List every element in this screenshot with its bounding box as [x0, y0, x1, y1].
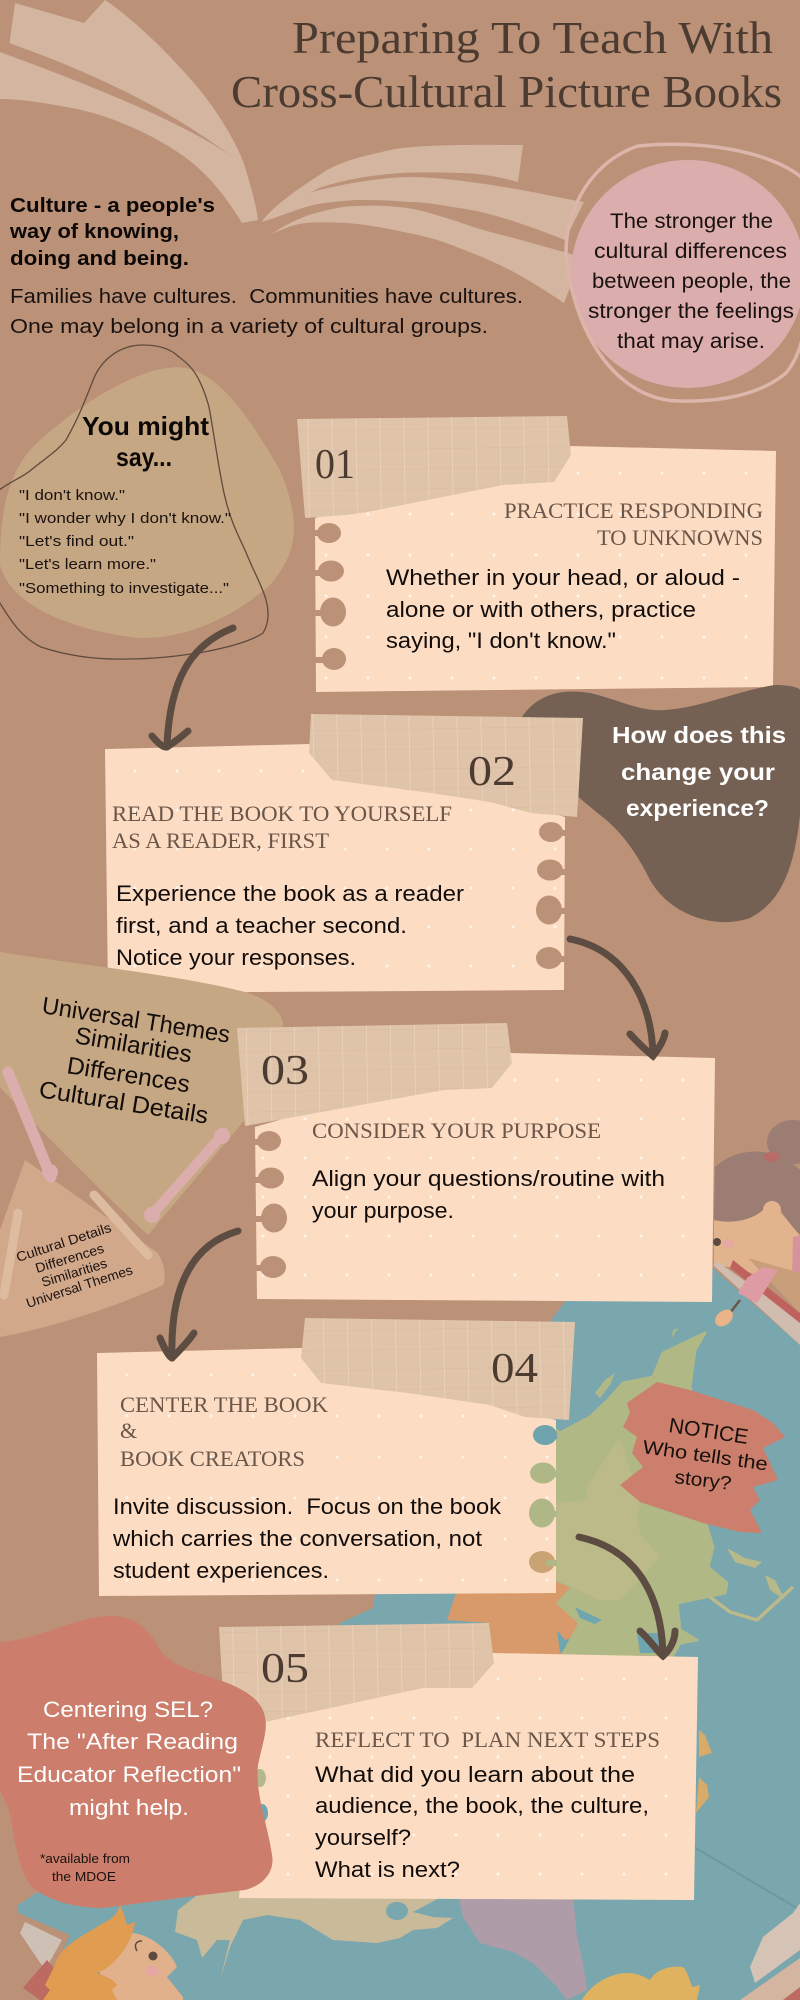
panel: you might say: say...: [116, 442, 172, 472]
callout: how does this change your experience: How does this: [612, 722, 786, 748]
panel: step 01: Whether in your head, or aloud -: [386, 565, 740, 590]
panel: step 04: BOOK CREATORS: [120, 1446, 305, 1471]
panel: universal themes triangles: Cultural Details: [37, 1076, 210, 1130]
panel: step 05: REFLECT TO PLAN NEXT STEPS: [315, 1727, 660, 1752]
callout: cultural differences: The stronger the: [610, 209, 773, 233]
panel: you might say: "Something to investigate...": [19, 580, 229, 597]
panel: universal themes triangles: Universal Themes: [40, 992, 232, 1049]
illustration: open book pages: [0, 0, 584, 303]
panel: step 03: CONSIDER YOUR PURPOSE: [312, 1118, 601, 1143]
panel: step 04: which carries the conversation, not: [112, 1526, 483, 1551]
panel: step 03: Align your questions/routine with: [312, 1166, 665, 1191]
panel: universal themes triangles: Universal Themes: [24, 1262, 135, 1311]
panel: step 05: What is next?: [315, 1857, 460, 1882]
panel: notice callout: NOTICE: [667, 1414, 750, 1449]
callout: cultural differences: stronger the feelings: [588, 299, 794, 323]
callout: centering SEL: might help.: [69, 1795, 189, 1820]
panel: universal themes triangles: Similarities: [73, 1022, 194, 1068]
panel: step 05: audience, the book, the culture,: [315, 1793, 649, 1818]
panel: step 05: yourself?: [315, 1825, 411, 1850]
panel: you might say: "I don't know.": [19, 487, 125, 504]
callout: centering SEL: *available from: [40, 1852, 130, 1866]
panel: step 05: 05: [261, 1646, 309, 1692]
panel: universal themes triangles: Cultural Details: [14, 1220, 113, 1265]
illustration: child with orange hair and book: [20, 1905, 183, 2000]
panel: step 02: 02: [468, 749, 516, 795]
panel: you might say: "Let's learn more.": [19, 556, 156, 573]
callout: centering SEL: the MDOE: [52, 1870, 116, 1884]
panel: notice callout: Who tells the: [641, 1437, 769, 1475]
title: Preparing To Teach With: [292, 12, 773, 63]
panel: step 05: What did you learn about the: [315, 1762, 635, 1787]
text: families and communities: [10, 285, 523, 338]
panel: step 04: Invite discussion. Focus on the book: [113, 1494, 502, 1519]
panel: step 04: student experiences.: [113, 1558, 329, 1583]
panel: step 04: [97, 1318, 575, 1596]
panel: you might say: [0, 345, 294, 659]
arrow: step 02 to step 03: [570, 939, 665, 1056]
callout: centering SEL: The "After Reading: [27, 1729, 238, 1754]
arrow: step 04 to step 05: [579, 1537, 675, 1656]
panel: step 04: 04: [491, 1346, 538, 1392]
callout: centering SEL: [0, 1616, 273, 1908]
text: culture definition: way of knowing,: [9, 220, 179, 243]
panel: step 02: [105, 714, 583, 993]
panel: universal themes triangles: Similarities: [39, 1256, 109, 1290]
panel: step 03: your purpose.: [312, 1198, 454, 1223]
text: culture definition: doing and being.: [10, 247, 189, 270]
panel: step 04: &: [120, 1418, 137, 1443]
panel: notice callout: story?: [673, 1467, 733, 1495]
panel: you might say: You might: [82, 411, 209, 441]
title: Cross-Cultural Picture Books: [231, 66, 782, 117]
panel: you might say: "Let's find out.": [19, 533, 134, 550]
panel: universal themes triangles: [0, 952, 283, 1337]
panel: step 02: Notice your responses.: [116, 945, 356, 970]
panel: step 01: alone or with others, practice: [386, 597, 696, 622]
panel: step 02: first, and a teacher second.: [116, 913, 407, 938]
callout: centering SEL: Centering SEL?: [43, 1697, 213, 1722]
panel: step 03: [237, 1023, 715, 1302]
text: culture definition: Culture - a people's: [10, 194, 215, 217]
panel: step 01: PRACTICE RESPONDING: [504, 498, 763, 523]
panel: step 02: Experience the book as a reader: [116, 881, 465, 906]
panel: step 01: 01: [315, 442, 355, 488]
panel: step 01: saying, "I don't know.": [386, 628, 616, 653]
callout: how does this change your experience: [520, 685, 800, 922]
illustration: girl with pigtail reading: [712, 1120, 800, 1345]
callout: cultural differences: that may arise.: [617, 329, 765, 353]
title: [231, 12, 782, 117]
callout: how does this change your experience: experience?: [626, 795, 769, 821]
callout: centering SEL: Educator Reflection": [17, 1762, 241, 1787]
callout: cultural differences: between people, the: [592, 269, 791, 293]
arrow: step 03 to step 04: [160, 1231, 238, 1358]
callout: cultural differences: cultural differences: [594, 239, 787, 263]
panel: step 04: CENTER THE BOOK: [120, 1392, 328, 1417]
panel: step 01: TO UNKNOWNS: [597, 525, 763, 550]
panel: notice callout: [620, 1382, 785, 1533]
panel: step 02: AS A READER, FIRST: [112, 828, 330, 853]
callout: cultural differences: [566, 144, 800, 401]
panel: universal themes triangles: Differences: [33, 1241, 106, 1276]
callout: how does this change your experience: change your: [621, 759, 775, 785]
text: culture definition: [9, 194, 215, 270]
panel: step 03: 03: [261, 1048, 309, 1094]
panel: universal themes triangles: Differences: [65, 1052, 192, 1098]
panel: step 02: READ THE BOOK TO YOURSELF: [112, 801, 452, 826]
panel: you might say: "I wonder why I don't know.": [19, 510, 231, 527]
text: families and communities: One may belong in a variety of cultural groups.: [10, 315, 488, 338]
illustration: blonde child and book: [582, 1903, 800, 2000]
panel: step 01: [297, 416, 776, 692]
illustration: world map: [18, 1268, 800, 2000]
panel: step 05: [219, 1623, 698, 1900]
arrow: you might say to step 02: [152, 628, 233, 747]
text: families and communities: Families have cultures. Communities have cultures.: [10, 285, 523, 308]
